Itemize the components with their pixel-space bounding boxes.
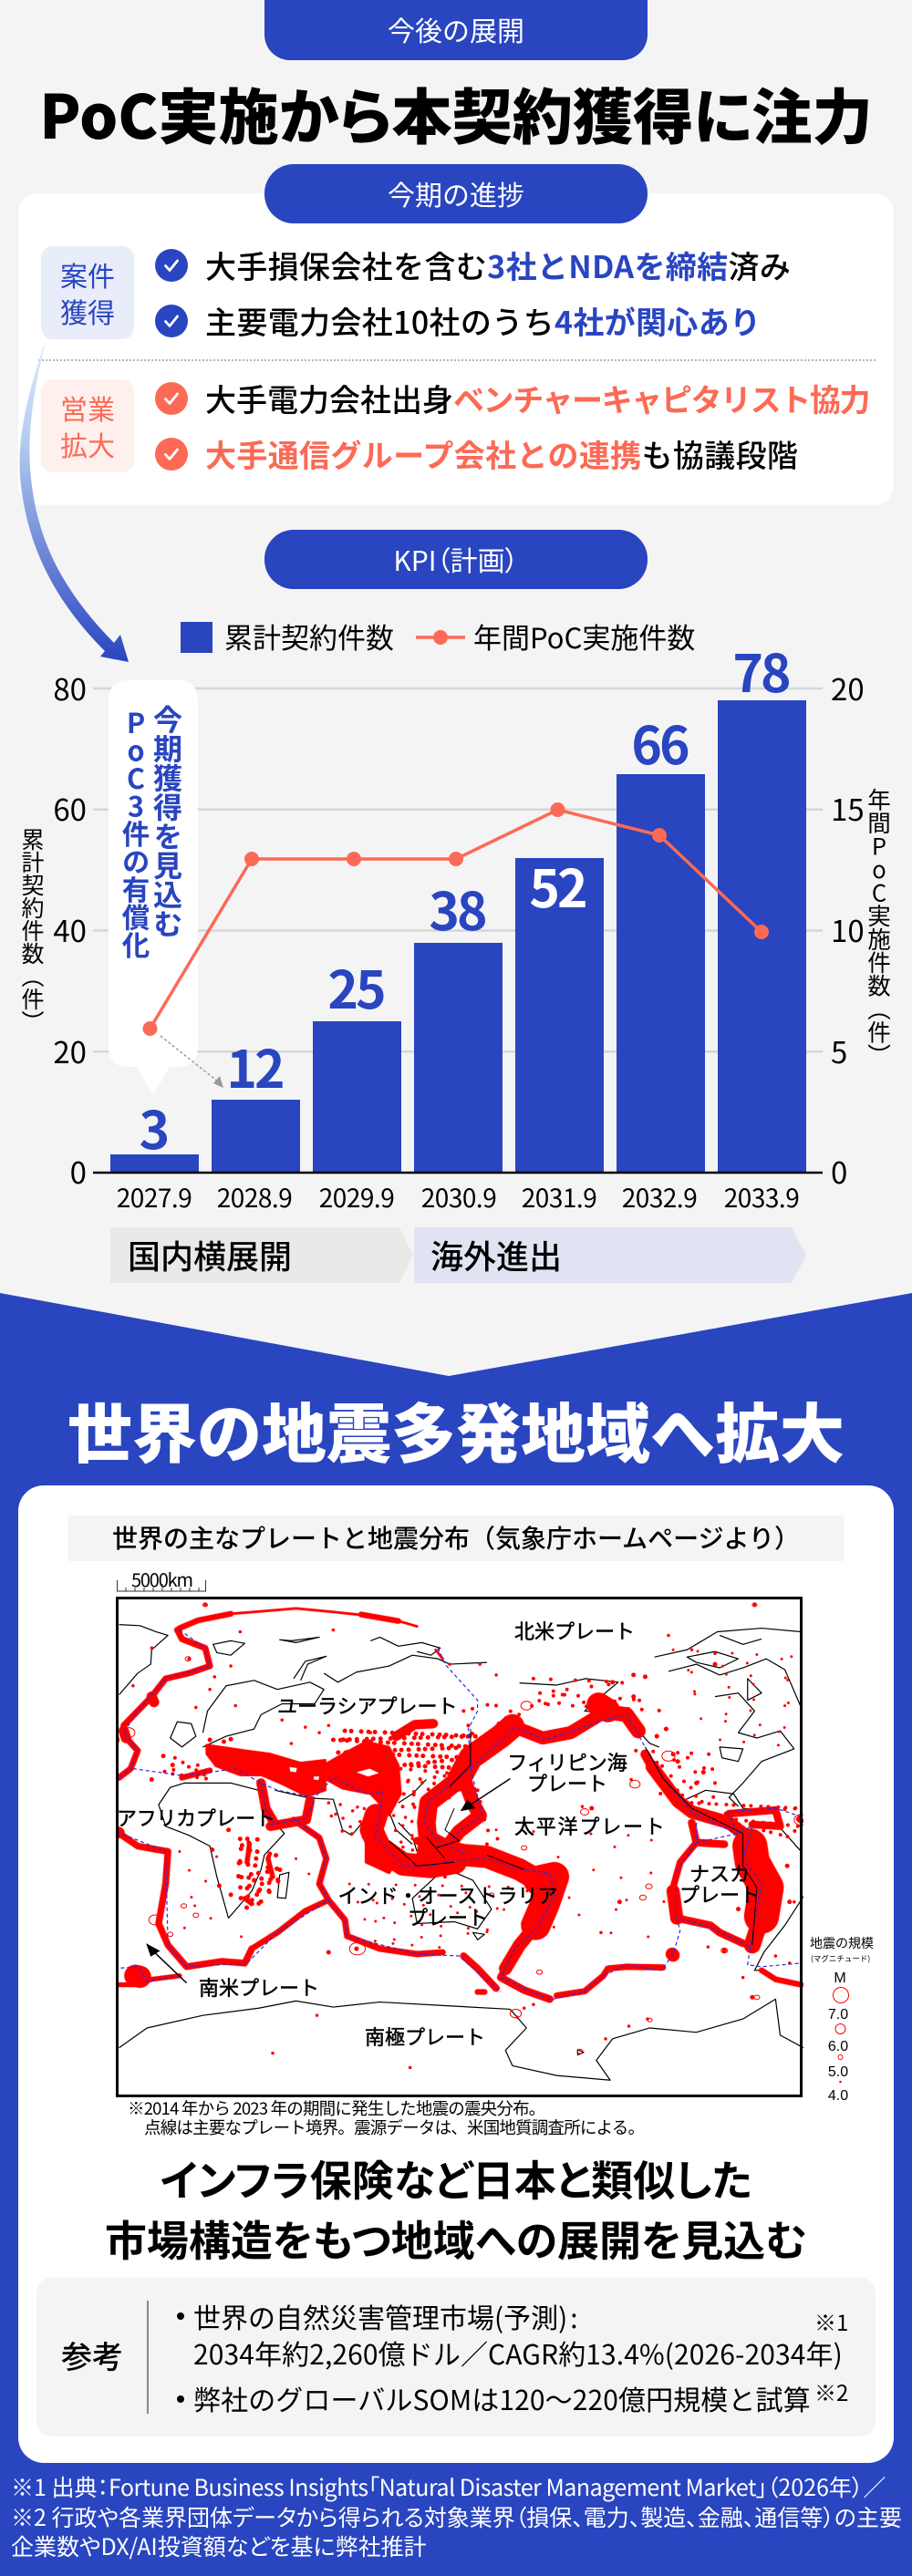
tag: sales expansion: 営業 [60, 388, 115, 428]
year labels: 2032.9 [622, 1179, 697, 1216]
left axis labels [53, 666, 87, 1193]
value labels: 52 [529, 848, 586, 923]
phase label: overseas: 海外進出 [430, 1231, 562, 1278]
left axis labels: 40 [53, 907, 87, 951]
map caption: ※2014 年から 2023 年の期間に発生した地震の震央分布。 [128, 2096, 544, 2120]
map scale bar [117, 1566, 206, 1592]
footnotes: ※1 出典：Fortune Business Insights「Natural Disaster Management Market」（2026年）／ [11, 2470, 886, 2503]
legend: 累計契約件数 [224, 616, 394, 657]
right axis labels [831, 666, 865, 1193]
tag: sales expansion: 拡大 [60, 424, 115, 464]
heading: market structure: インフラ保険など日本と類似した [160, 2148, 752, 2209]
right axis labels: 20 [831, 666, 865, 709]
year labels: 2027.9 [117, 1179, 192, 1216]
heading: market structure: 市場構造をもつ地域への展開を見込む [105, 2209, 807, 2269]
map title bar: 世界の主なプレートと地震分布（気象庁ホームページより） [112, 1519, 800, 1556]
panel: reference [36, 2278, 876, 2436]
value labels: 3 [140, 1090, 168, 1164]
bullet 1 [177, 2296, 843, 2373]
map label: Philippine Sea plate: プレート [527, 1768, 607, 1797]
chart: contracts and PoC [16, 616, 896, 1216]
value labels: 78 [732, 633, 789, 708]
value labels: 38 [429, 871, 485, 946]
heading: market structure [105, 2148, 807, 2269]
map: world plates and earthquakes [117, 1598, 803, 2098]
tag: deal acquisition: 獲得 [60, 291, 115, 331]
map legend: magnitude: 6.0 [828, 2039, 848, 2054]
left axis labels: 60 [53, 786, 87, 830]
tag: deal acquisition: 案件 [60, 254, 115, 295]
legend: 年間PoC実施件数 [473, 616, 695, 657]
map legend: magnitude: M [834, 1971, 846, 1986]
bullet 2: 弊社のグローバルSOMは120〜220億円規模と試算 [193, 2378, 811, 2418]
legend [181, 616, 695, 657]
small dotted arrow [161, 1036, 223, 1088]
callout [109, 680, 198, 1095]
vertical rule [147, 2301, 149, 2414]
title: PoC実施から本契約獲得に注力 [39, 69, 873, 157]
map label: Antarctic plate: 南極プレート [365, 2022, 485, 2051]
callout: 今期獲得を見込む [147, 705, 189, 938]
note mark 1: ※1 [814, 2305, 848, 2337]
icon: check 1 [155, 249, 188, 282]
bullet 1: 2034年約2,260億ドル／CAGR約13.4%(2026-2034年) [193, 2333, 843, 2373]
value labels: 25 [327, 949, 384, 1024]
right axis labels: 0 [831, 1149, 847, 1193]
map label: South American plate: 南米プレート [199, 1972, 319, 2002]
value labels: 12 [226, 1029, 283, 1103]
icon: check 2 [155, 305, 188, 337]
pill: KPI heading [264, 530, 648, 589]
value labels: 66 [631, 705, 689, 780]
phase label: domestic: 国内横展開 [128, 1231, 292, 1278]
pill: KPI heading: KPI（計画） [393, 539, 519, 579]
phase arrow: overseas [414, 1227, 806, 1283]
map label: Philippine Sea plate: フィリピン海 [507, 1747, 627, 1776]
left axis labels: 0 [70, 1149, 87, 1193]
map label: African plate: アフリカプレート [117, 1803, 275, 1832]
map label: Indo-Australian plate: プレート [408, 1902, 488, 1931]
map label: Eurasian plate: ユーラシアプレート [277, 1691, 458, 1720]
line series: annual PoC [142, 802, 769, 1036]
reference label: 参考 [61, 2333, 123, 2377]
panel: progress this term [18, 193, 894, 505]
map legend: magnitude: 7.0 [828, 2007, 848, 2023]
map legend: magnitude [810, 1934, 874, 2103]
text: row 4: 大手通信グループ会社との連携も協議段階 [205, 431, 798, 476]
map legend: magnitude: 地震の規模 [810, 1934, 874, 1952]
footnotes: 企業数やDX/AI投資額などを基に弊社推計 [11, 2529, 427, 2562]
map label: North American plate: 北米プレート [514, 1616, 635, 1645]
pill: section label top [264, 0, 648, 60]
map label: Nazca plate [679, 1858, 760, 1909]
divider [38, 359, 876, 361]
right axis labels: 15 [831, 786, 865, 830]
pill: section label top: 今後の展開 [388, 9, 524, 49]
map legend: magnitude: (マグニチュード) [811, 1953, 870, 1964]
icon: check 3 [155, 382, 188, 415]
blue background section [0, 1293, 912, 2576]
map label: Nazca plate: プレート [679, 1879, 760, 1909]
tag: deal acquisition [41, 246, 134, 339]
year labels: 2033.9 [724, 1179, 799, 1216]
map scale bar: 5000km [131, 1566, 192, 1592]
right axis labels: 5 [831, 1029, 847, 1072]
icon: check 4 [155, 438, 188, 471]
year labels: 2030.9 [421, 1179, 496, 1216]
bars [110, 700, 806, 1173]
map label: Indo-Australian plate: インド・オーストラリア [338, 1880, 557, 1909]
map legend: magnitude: 5.0 [828, 2064, 848, 2080]
value labels [140, 633, 789, 1164]
map label: Nazca plate: ナスカ [689, 1858, 750, 1888]
left axis labels: 20 [53, 1029, 87, 1072]
right axis title: 年間PoC実施件数（件） [863, 788, 896, 1067]
map label: Pacific plate: 太平洋プレート [514, 1811, 667, 1840]
right axis labels: 10 [831, 907, 865, 951]
phase arrow: domestic rollout [110, 1227, 412, 1283]
pill: progress heading [264, 164, 648, 223]
map caption: 点線は主要なプレート境界。震源データは、米国地質調査所による。 [144, 2116, 644, 2139]
text: row 3: 大手電力会社出身ベンチャーキャピタリスト協力 [205, 376, 869, 420]
pill: progress heading: 今期の進捗 [388, 173, 524, 213]
year labels: 2028.9 [217, 1179, 292, 1216]
year labels: 2029.9 [319, 1179, 394, 1216]
text: row 2: 主要電力会社10社のうち4社が関心あり [205, 298, 761, 343]
heading: expansion: 世界の地震多発地域へ拡大 [67, 1383, 845, 1476]
callout: PoC3件の有償化 [116, 709, 156, 959]
text: row 1: 大手損保会社を含む3社とNDAを締結済み [205, 243, 791, 287]
footnotes [11, 2470, 902, 2562]
footnotes: ※2 行政や各業界団体データから得られる対象業界（損保、電力、製造、金融、通信等）の主要 [11, 2500, 902, 2533]
map border [116, 1597, 803, 2097]
year labels: 2031.9 [522, 1179, 596, 1216]
map label: Indo-Australian plate [338, 1880, 557, 1931]
year labels [117, 1179, 799, 1216]
tag: sales expansion [41, 379, 134, 472]
bullet 1: 世界の自然災害管理市場(予測): [193, 2296, 578, 2336]
map label: Philippine Sea plate [507, 1747, 627, 1797]
map caption [128, 2096, 644, 2139]
left axis labels: 80 [53, 666, 87, 709]
panel: global expansion [18, 1485, 894, 2463]
arrow: curved gradient arrow to chart [20, 346, 129, 662]
note mark 2: ※2 [814, 2375, 848, 2407]
left axis title: 累計契約件数（件） [16, 828, 49, 1033]
